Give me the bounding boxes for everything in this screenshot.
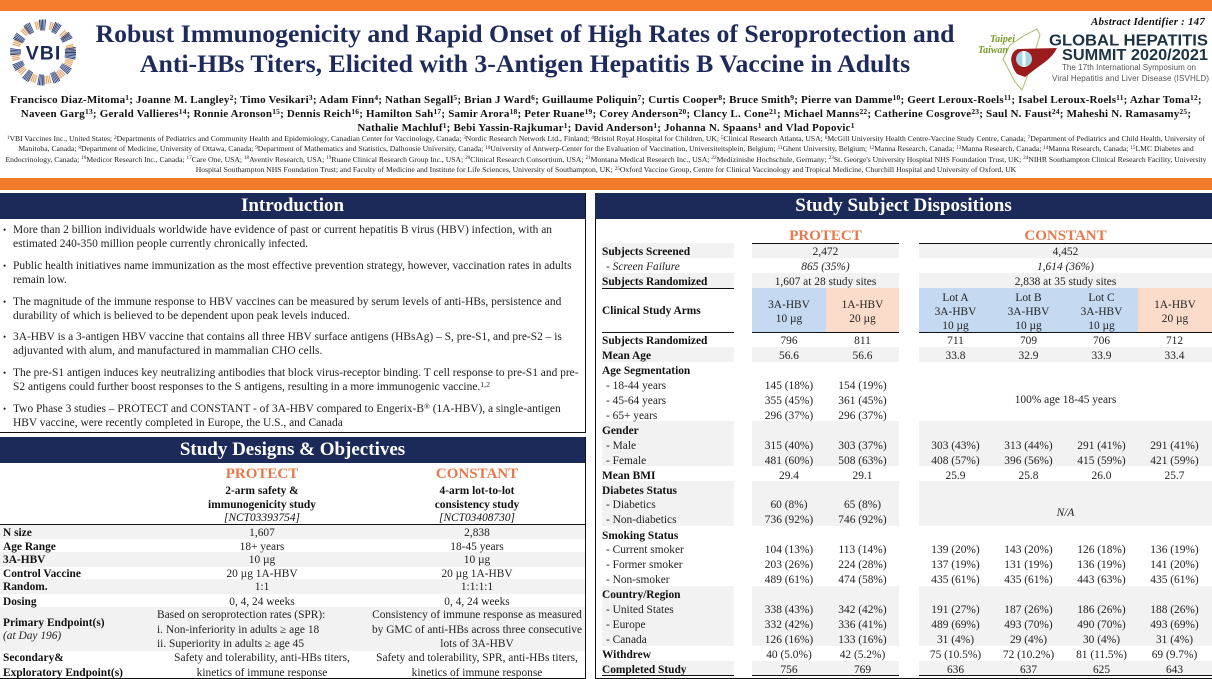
row: dosing: 0, 4, 24 weeks [229, 596, 295, 608]
title: Anti-HBs Titers, Elicited with 3-Antigen Hepatitis B Vaccine in Adults [140, 49, 910, 78]
row: mean age: 56.6 [779, 350, 799, 362]
row: former smoker: 203 (26%) [765, 559, 813, 571]
heading: introduction: Introduction [241, 195, 344, 216]
arm: PROTECT 1A-HBV [826, 288, 899, 332]
arm: PROTECT 1A-HBV: 1A-HBV [842, 298, 883, 310]
row: Europe: - Europe [606, 619, 646, 631]
row: mean age: 33.8 [946, 350, 965, 362]
bullet 3 [3, 296, 562, 322]
panel: study subject dispositions [595, 193, 1212, 679]
row: current smoker: 136 (19%) [1150, 544, 1199, 556]
arm: Lot B: 10 µg [1015, 320, 1042, 332]
row: dosing: Dosing [3, 596, 37, 608]
column head: CONSTANT: 4-arm lot-to-lot [440, 485, 514, 497]
row: subjects randomized [602, 334, 1183, 346]
row: Europe: 336 (41%) [838, 619, 887, 631]
row: Europe: 493 (70%) [1004, 619, 1053, 631]
row: non-smoker: 474 (58%) [838, 574, 887, 586]
row: non-smoker: - Non-smoker [606, 574, 670, 586]
authors [10, 93, 1202, 134]
row: N size: 1,607 [249, 526, 275, 538]
bullet 5: S2 antigens could further boost responses to the S antigens, resulting in a more immunogenic vaccine.1,2 [13, 380, 490, 393]
panel: study designs and objectives [0, 437, 586, 679]
bullet 6 [3, 402, 561, 429]
row: diabetics: - Diabetics [606, 499, 656, 511]
row: smoking status: Smoking Status [602, 530, 678, 542]
row: age range [3, 540, 504, 552]
row: 3A-HBV: 3A-HBV [3, 554, 45, 566]
row: mean BMI: 26.0 [1092, 470, 1111, 482]
column head: PROTECT [208, 466, 316, 524]
row: male: 291 (41%) [1150, 440, 1199, 452]
heading: study subject dispositions: Study Subject Dispositions [795, 195, 1012, 216]
arm: Lot A: Lot A [942, 292, 969, 304]
text: 1,614 (36%) [1037, 260, 1094, 272]
row: male: - Male [606, 440, 636, 452]
row: completed study: 636 [947, 664, 964, 676]
logo: Global Hepatitis Summit: Taipei [990, 34, 1015, 45]
row: non-diabetics: 736 (92%) [765, 514, 813, 526]
arm: CONSTANT 1A-HBV [1138, 288, 1212, 332]
row: subjects randomized at sites [602, 276, 876, 288]
row: current smoker: 126 (18%) [1077, 544, 1126, 556]
row: diabetics [606, 499, 881, 511]
row: female: 415 (59%) [1077, 454, 1126, 466]
row: country/region: Country/Region [602, 589, 680, 601]
row: age segmentation: Age Segmentation [602, 364, 690, 376]
row: mean age: 33.4 [1165, 350, 1184, 362]
bottom orange header band [0, 178, 1212, 190]
bullet 6: • [3, 404, 6, 414]
row: subjects randomized: 711 [947, 334, 964, 346]
bullet 5: The pre-S1 antigen induces key neutralizing antibodies that block virus-receptor binding. T cell response to pre-S1 and pre- [13, 367, 579, 379]
bullet 3: durability of which is believed to be dependent upon peak levels induced. [13, 310, 350, 322]
row: former smoker: 141 (20%) [1150, 559, 1199, 571]
logo: Global Hepatitis Summit: SUMMIT 2020/2021 [1062, 47, 1208, 64]
column head: CONSTANT: [NCT03408730] [439, 512, 515, 524]
row: United States: 338 (43%) [765, 604, 813, 616]
row: withdrew: 69 (9.7%) [1152, 648, 1197, 660]
arm: Lot B: 3A-HBV [1008, 306, 1049, 318]
row: non-smoker: 443 (63%) [1077, 574, 1126, 586]
row: completed study: 625 [1093, 664, 1110, 676]
row: non-smoker: 435 (61%) [1004, 574, 1053, 586]
row: withdrew: 72 (10.2%) [1003, 648, 1054, 660]
arm: Lot B: Lot B [1015, 292, 1042, 304]
row: mean BMI [602, 470, 1184, 482]
row: male: 291 (41%) [1077, 440, 1126, 452]
arm: Lot A: 10 µg [942, 320, 969, 332]
column head: CONSTANT: consistency study [435, 499, 519, 511]
row: non-smoker [0, 573, 1212, 588]
arm: PROTECT 3A-HBV: 10 µg [776, 312, 802, 324]
affiliations: Endocrinology, Canada; 16Medicor Research Inc., Canada; 17Care One, USA; 18Aventiv Research, USA; 19Ruane Clinical Research Group Inc., USA; 20Clinical Research Consortium, USA; 21Montana Medical Research Inc., USA; 22Medizinishe Hochschule, Germany; 23St. George's University Hospital NHS Foundation Trust, UK; 24NIHR Southampton Clinical Research Facility, University [5, 155, 1206, 164]
arm: CONSTANT 1A-HBV: 20 µg [1162, 312, 1188, 324]
row: 45-64 years [606, 394, 887, 406]
bullet 4: adjuvanted with alum, and manufactured in mammalian CHO cells. [13, 345, 322, 357]
row: secondary endpoints: kinetics of immune response [197, 666, 327, 678]
row: 65+ years: - 65+ years [606, 410, 657, 422]
row: former smoker: 136 (19%) [1077, 559, 1126, 571]
row: randomization: 1:1 [255, 581, 269, 593]
row: N size: 2,838 [464, 526, 490, 538]
text: 2,838 at 35 study sites [1015, 276, 1116, 288]
bullet 1: More than 2 billion individuals worldwide have evidence of past or current hepatitis B virus (HBV) infection, with an [13, 224, 552, 236]
row: mean age: 56.6 [853, 350, 872, 362]
arm: Lot B [992, 288, 1065, 332]
logo: Global Hepatitis Summit [978, 28, 1209, 91]
row: subjects screened: 2,472 [813, 246, 838, 258]
row: subjects randomized: 712 [1166, 334, 1183, 346]
arm: PROTECT 1A-HBV: 20 µg [849, 312, 876, 324]
row: N size [3, 526, 490, 538]
bullet 5 [3, 367, 579, 393]
row: 18-44 years: 154 (19%) [838, 380, 887, 392]
row: United States: - United States [606, 604, 674, 616]
row: withdrew [0, 648, 1212, 662]
row: 45-64 years: 355 (45%) [765, 394, 813, 406]
row: subjects randomized: 706 [1093, 334, 1110, 346]
logo: Global Hepatitis Summit: GLOBAL HEPATITIS [1049, 32, 1208, 50]
row: Europe: 489 (69%) [931, 619, 980, 631]
row: non-smoker: 435 (61%) [1150, 574, 1199, 586]
row: secondary endpoints: Safety and tolerability, SPR, anti-HBs titers, [376, 652, 578, 664]
heading: study designs: Study Designs & Objectives [180, 439, 405, 460]
row: 45-64 years: - 45-64 years [606, 394, 666, 406]
logo: Global Hepatitis Summit: Taiwan [978, 45, 1008, 56]
logo: VBI: VBI [26, 42, 61, 64]
row: mean age: 32.9 [1019, 350, 1038, 362]
row: Canada: 126 (16%) [765, 634, 813, 646]
row: former smoker: 137 (19%) [931, 559, 980, 571]
row: Europe: 332 (42%) [765, 619, 813, 631]
row: male: 303 (43%) [931, 440, 980, 452]
note: CONSTANT age: 100% age 18-45 years [1015, 394, 1116, 406]
arm: PROTECT 3A-HBV [752, 288, 826, 332]
row: primary endpoints: ii. Superiority in adults ≥ age 45 [157, 638, 304, 650]
row: mean BMI: 25.7 [1165, 470, 1184, 482]
row: mean BMI: 29.4 [779, 470, 799, 482]
row: secondary endpoints: Secondary& [3, 652, 64, 664]
row: current smoker: 143 (20%) [1004, 544, 1053, 556]
bullet 6: HBV vaccine, were recently completed in Europe, the U.S., and Canada [13, 417, 343, 429]
row: former smoker: 224 (28%) [838, 559, 887, 571]
row: Canada: 133 (16%) [838, 634, 887, 646]
row: 18-44 years [606, 380, 887, 392]
row: randomization [3, 581, 493, 593]
row: primary endpoints [3, 609, 582, 650]
bullet 2 [3, 260, 572, 286]
row: United States: 191 (27%) [931, 604, 980, 616]
heading: introduction [0, 193, 585, 219]
row: United States: 188 (26%) [1150, 604, 1199, 616]
row: Canada: 31 (4%) [1156, 634, 1193, 646]
row: non-diabetics: 746 (92%) [838, 514, 887, 526]
column head: PROTECT: [NCT03393754] [224, 512, 300, 524]
bullet 1: estimated 240-350 million people currently chronically infected. [13, 238, 308, 250]
row: male: 303 (37%) [838, 440, 887, 452]
row: female: 396 (56%) [1004, 454, 1053, 466]
row: female: - Female [606, 454, 646, 466]
row: United States: 187 (26%) [1004, 604, 1053, 616]
row: completed study: 756 [780, 664, 798, 676]
row: diabetics: 60 (8%) [770, 499, 808, 511]
bullet 2: Public health initiatives name immunization as the most effective prevention strategy, however, vaccination rates in adults [13, 260, 572, 272]
text: 4,452 [1053, 246, 1078, 258]
affiliations: Manitoba, Canada; 8Department of Medicine, University of Ottawa, Canada; 9Department of Mathematics and Statistics, Dalhousie University, Canada; 10University of Antwerp-Center for the Evaluation of Vaccination, Universiteitsplein, Belgium; 11Ghent University, Belgium; 12Manna Research, Canada; 13Manna Research, Canada; 14Manna Research, Canada; 15LMC Diabetes and [18, 144, 1194, 153]
row: male [606, 440, 1199, 452]
title: Robust Immunogenicity and Rapid Onset of High Rates of Seroprotection and [96, 19, 954, 48]
panel: introduction [0, 193, 586, 433]
row: mean age: 33.9 [1092, 350, 1111, 362]
row: Europe: 490 (70%) [1077, 619, 1126, 631]
row: 18-44 years: - 18-44 years [606, 380, 666, 392]
row: age range: 18-45 years [450, 540, 504, 552]
disposition grey bands [602, 243, 1212, 675]
row: withdrew: 81 (11.5%) [1076, 648, 1127, 660]
bullet 1 [3, 224, 552, 250]
row: Canada: 30 (4%) [1083, 634, 1120, 646]
logo: VBI [10, 20, 76, 86]
row: female: 481 (60%) [765, 454, 813, 466]
row: United States [0, 603, 1212, 618]
row: screen failure: 865 (35%) [801, 260, 850, 272]
row: mean age: Mean Age [602, 350, 651, 362]
row: control vaccine: Control Vaccine [3, 568, 81, 580]
row: female: 421 (59%) [1150, 454, 1199, 466]
column head: PROTECT: PROTECT [226, 466, 298, 482]
bullet 5: • [3, 368, 6, 378]
row: current smoker: - Current smoker [606, 544, 684, 556]
arm: Lot C [1065, 288, 1138, 332]
row: 65+ years [606, 410, 887, 422]
row: primary endpoints: (at Day 196) [3, 630, 61, 642]
arm: Lot C: 10 µg [1088, 320, 1115, 332]
bullet 2: • [3, 261, 6, 271]
row: screen failure [606, 260, 850, 272]
column head: PROTECT: 2-arm safety & [225, 485, 299, 497]
row: control vaccine: 20 µg 1A-HBV [226, 568, 298, 580]
row: Canada: 29 (4%) [1010, 634, 1047, 646]
logo: Global Hepatitis Summit: Viral Hepatitis and Liver Disease (ISVHLD) [1052, 74, 1209, 83]
heading: study subject dispositions [595, 193, 1212, 219]
column head: PROTECT: immunogenicity study [208, 499, 316, 511]
row: Canada: - Canada [606, 634, 647, 646]
row: primary endpoints: Based on seroprotection rates (SPR): [157, 609, 325, 621]
row: dosing [3, 596, 510, 608]
row: secondary endpoints [3, 652, 578, 678]
row: male: 313 (44%) [1004, 440, 1053, 452]
abstract identifier: Abstract Identifier : 147 [1091, 16, 1205, 28]
grey row bands [0, 525, 585, 651]
row: non-smoker: 489 (61%) [765, 574, 813, 586]
column head: CONSTANT [435, 466, 520, 524]
row: former smoker: 131 (19%) [1004, 559, 1053, 571]
row: female: 508 (63%) [838, 454, 887, 466]
row: United States: 186 (26%) [1077, 604, 1126, 616]
row: male: 315 (40%) [765, 440, 813, 452]
row: completed study: Completed Study [602, 664, 686, 676]
row: age range: Age Range [3, 540, 56, 552]
row: control vaccine [3, 568, 513, 580]
bullet 3: • [3, 296, 6, 306]
row: non-smoker: 435 (61%) [931, 574, 980, 586]
row: 3A-HBV: 10 µg [464, 554, 490, 566]
row: subjects randomized at sites: 1,607 at 28 study sites [775, 276, 876, 288]
row: subjects randomized at sites: Subjects Randomized [602, 276, 707, 288]
affiliations [5, 134, 1206, 174]
row: subjects randomized: 709 [1020, 334, 1037, 346]
row: subjects screened: Subjects Screened [602, 246, 690, 258]
clinical study arms label: Clinical Study Arms [602, 305, 701, 317]
arm: Lot C: 3A-HBV [1081, 306, 1122, 318]
heading: study designs [0, 437, 585, 463]
row: primary endpoints: Consistency of immune response as measured [372, 609, 582, 621]
row: completed study: 769 [854, 664, 871, 676]
row: current smoker: 113 (14%) [838, 544, 886, 556]
row: completed study [0, 662, 1212, 678]
note: CONSTANT diabetes N/A: N/A [1057, 507, 1074, 519]
column head: PROTECT: PROTECT [789, 228, 862, 244]
row: current smoker: 139 (20%) [931, 544, 980, 556]
arm: PROTECT 3A-HBV: 3A-HBV [768, 298, 810, 310]
row: female [606, 454, 1199, 466]
authors: Francisco Diaz-Mitoma1; Joanne M. Langley2; Timo Vesikari3; Adam Finn4; Nathan Segall5; Brian J Ward6; Guillaume Poliquin7; Curtis Cooper8; Bruce Smith9; Pierre van Damme10; Geert Leroux-Roels11; Isabel Leroux-Roels11; Azhar Toma12; [10, 93, 1202, 106]
bullet 2: remain low. [13, 274, 67, 286]
row: N size: N size [3, 526, 32, 538]
row: randomization: 1:1:1:1 [461, 581, 493, 593]
row: withdrew: 75 (10.5%) [930, 648, 981, 660]
row: 3A-HBV [3, 554, 490, 566]
row: mean BMI: 29.1 [853, 470, 872, 482]
row: primary endpoints: i. Non-inferiority in adults ≥ age 18 [157, 624, 319, 636]
bullet 3: The magnitude of the immune response to HBV vaccines can be measured by serum levels of anti-HBs, persistence and [13, 296, 561, 308]
row: 65+ years: 296 (37%) [838, 410, 887, 422]
arm: Lot C: Lot C [1088, 292, 1115, 304]
row: gender: Gender [602, 424, 639, 436]
row: screen failure: - Screen Failure [606, 260, 680, 272]
row: former smoker [0, 558, 1212, 573]
row: subjects randomized: 811 [854, 334, 871, 346]
bullet 1: • [3, 225, 6, 235]
row: 65+ years: 296 (37%) [765, 410, 813, 422]
row: mean BMI: 25.8 [1019, 470, 1038, 482]
row: withdrew: 42 (5.2%) [840, 648, 885, 660]
row: non-diabetics: - Non-diabetics [606, 514, 677, 526]
arm: CONSTANT 1A-HBV: 1A-HBV [1154, 298, 1196, 310]
row: secondary endpoints: kinetics of immune response [412, 666, 542, 678]
top orange band [0, 0, 1212, 11]
row: primary endpoints: lots of 3A-HBV [440, 638, 514, 650]
row: withdrew: Withdrew [602, 648, 651, 660]
row: Europe: 493 (69%) [1150, 619, 1199, 631]
row: subjects screened [602, 246, 838, 258]
row: primary endpoints: by GMC of anti-HBs across three consecutive [372, 624, 582, 636]
row: female: 408 (57%) [931, 454, 980, 466]
arm: Lot A: 3A-HBV [935, 306, 976, 318]
bullet 4: 3A-HBV is a 3-antigen HBV vaccine that contains all three HBV surface antigens (HBsAg) – S, pre-S1, and pre-S2 – is [13, 331, 562, 343]
authors: Nathalie Machluf1; Bebi Yassin-Rajkumar1; David Anderson1; Johanna N. Spaans1 and Vlad Popovic1 [357, 121, 855, 134]
bullet 4: • [3, 332, 6, 342]
row: subjects randomized: 796 [780, 334, 798, 346]
arm: Lot A [919, 288, 992, 332]
row: 45-64 years: 361 (45%) [838, 394, 887, 406]
row: secondary endpoints: Exploratory Endpoint(s) [3, 666, 123, 678]
row: randomization: Random. [3, 581, 48, 593]
row: non-diabetics [606, 514, 887, 526]
row: primary endpoints: Primary Endpoint(s) [3, 617, 105, 629]
row: withdrew: 40 (5.0%) [766, 648, 812, 660]
row: diabetics: 65 (8%) [844, 499, 881, 511]
row: completed study: 643 [1166, 664, 1183, 676]
row: secondary endpoints: Safety and tolerability, anti-HBs titers, [174, 652, 350, 664]
affiliations: 1VBI Vaccines Inc., United States; 2Departments of Pediatrics and Community Health and Epidemiology, Canadian Center for Vaccinology, Canada; 3Nordic Research Network Ltd., Finland; 4Bristol Royal Hospital for Children, UK; 5Clinical Research Atlanta, USA; 6McGill University Health Centre-Vaccine Study Centre, Canada; 7Department of Pediatrics and Child Health, University of [7, 134, 1205, 143]
row: mean BMI: 25.9 [946, 470, 965, 482]
row: mean age [602, 350, 1184, 362]
row: subjects randomized: Subjects Randomized [602, 334, 707, 346]
row: Europe [0, 618, 1212, 633]
column head: CONSTANT: CONSTANT [1024, 228, 1107, 244]
bullet 4 [3, 331, 562, 357]
row: current smoker: 104 (13%) [765, 544, 813, 556]
row: former smoker: - Former smoker [606, 559, 683, 571]
authors: Naveen Garg13; Gerald Vallieres14; Ronnie Aronson15; Dennis Reich16; Hamilton Sah17; Samir Arora18; Peter Ruane19; Corey Anderson20; Clancy L. Cone21; Michael Manns22; Catherine Cosgrove23; Saul N. Faust24; Maheshi N. Ramasamy25; [21, 107, 1191, 120]
row: mean BMI: Mean BMI [602, 470, 655, 482]
row: dosing: 0, 4, 24 weeks [444, 596, 510, 608]
row: completed study: 637 [1020, 664, 1037, 676]
row: Canada [0, 633, 1212, 648]
row: current smoker [0, 543, 1212, 558]
logo: Global Hepatitis Summit: The 17th International Symposium on [1062, 63, 1196, 72]
row: 18-44 years: 145 (18%) [765, 380, 813, 392]
row: 3A-HBV: 10 µg [249, 554, 275, 566]
row: diabetes status: Diabetes Status [602, 484, 677, 496]
bullet 6: Two Phase 3 studies – PROTECT and CONSTANT - of 3A-HBV compared to Engerix-B® (1A-HBV), a single-antigen [13, 402, 561, 415]
affiliations: Hospital Southampton NHS Foundation Trust; and Faculty of Medicine and Institute for Life Sciences, University of Southampton, UK; 25Oxford Vaccine Group, Centre for Clinical Vaccinology and Tropical Medicine, Churchill Hospital and University of Oxford, UK [196, 165, 1016, 174]
column head: CONSTANT: CONSTANT [436, 466, 518, 482]
row: United States: 342 (42%) [838, 604, 887, 616]
row: Canada: 31 (4%) [937, 634, 974, 646]
row: control vaccine: 20 µg 1A-HBV [441, 568, 513, 580]
title [96, 19, 954, 78]
row: age range: 18+ years [240, 540, 284, 552]
